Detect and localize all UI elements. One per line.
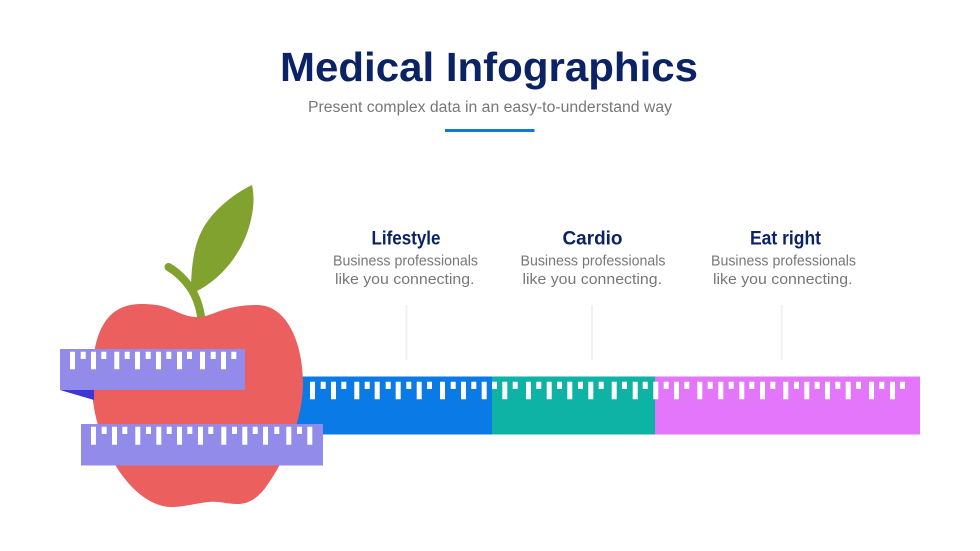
ruler segment: blue bbox=[280, 376, 492, 434]
text block: Cardio: Cardio bbox=[562, 228, 623, 250]
ruler segment: pink bbox=[655, 376, 920, 434]
text block: Cardio: like you connecting. bbox=[522, 271, 662, 288]
text block: Lifestyle: like you connecting. bbox=[335, 271, 474, 288]
text block: Eat right: like you connecting. bbox=[713, 271, 852, 288]
title: Medical Infographics bbox=[280, 44, 698, 90]
icon: apple bbox=[92, 185, 303, 507]
text block: Lifestyle: Lifestyle bbox=[372, 228, 441, 250]
apple body bbox=[92, 304, 303, 507]
text block: Eat right: Business professionals bbox=[711, 252, 856, 270]
text block: Cardio: Business professionals bbox=[520, 252, 666, 270]
apple stem bbox=[168, 267, 202, 320]
ruler segment: teal bbox=[492, 376, 655, 434]
title underline bbox=[445, 129, 534, 132]
text block: Lifestyle bbox=[333, 228, 478, 288]
apple leaf bbox=[191, 185, 254, 292]
text block: Lifestyle: Business professionals bbox=[333, 252, 478, 270]
lower wrapped ruler bbox=[81, 424, 323, 466]
subtitle: Present complex data in an easy-to-understand way bbox=[308, 99, 672, 116]
text block: Eat right: Eat right bbox=[750, 228, 821, 250]
text block: Cardio bbox=[520, 228, 666, 288]
long ruler bbox=[280, 376, 920, 434]
ruler fold shadow bbox=[60, 390, 94, 400]
upper wrapped ruler bbox=[60, 349, 245, 390]
text block: Eat right bbox=[711, 228, 856, 288]
ruler ticks bbox=[310, 382, 905, 399]
